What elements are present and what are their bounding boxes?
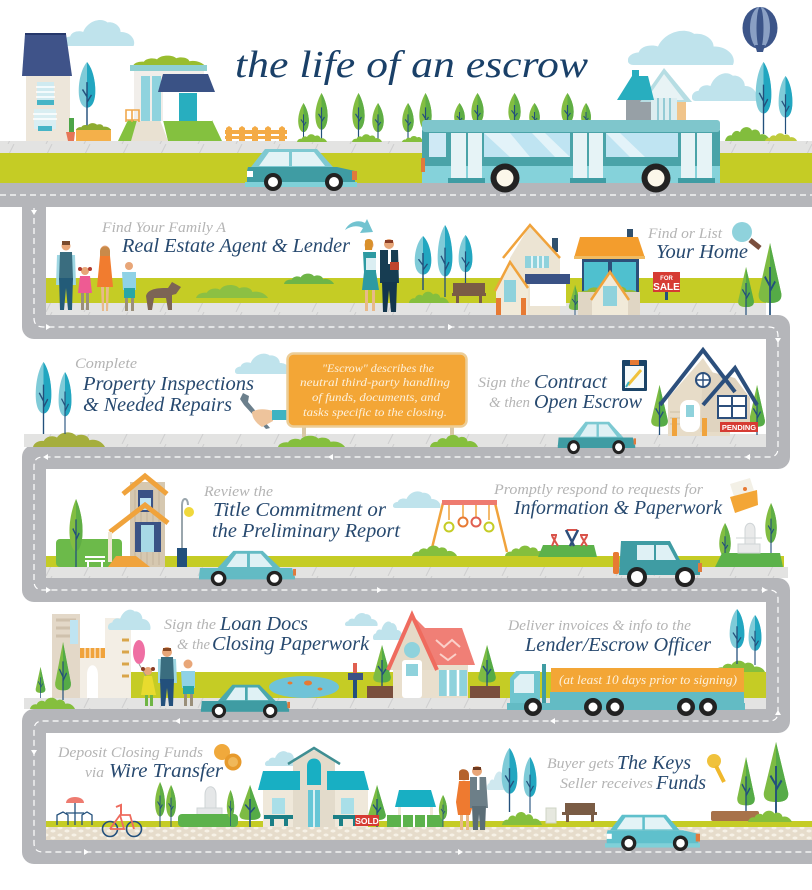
text: the keys (547, 753, 706, 794)
fence (225, 126, 287, 141)
text: contract: & then (489, 395, 530, 411)
text: inspections: & Needed Repairs (83, 395, 232, 416)
icon: clipboard (622, 360, 647, 391)
text: contract: Contract (534, 372, 608, 393)
house: tall navy roof (22, 34, 72, 141)
text: find agent (101, 220, 350, 257)
poplars (502, 748, 542, 825)
text: loan docs: Loan Docs (219, 614, 308, 635)
text: title commitment: Review the (203, 484, 274, 500)
house: red roof (367, 615, 500, 698)
text: contract: Open Escrow (534, 392, 642, 413)
icon: envelope (730, 478, 758, 513)
swing set (432, 500, 507, 552)
clouds (63, 20, 757, 101)
callout: escrow definition (288, 354, 466, 437)
text: title commitment (203, 484, 401, 542)
car (245, 149, 357, 191)
text: inspections: Complete (75, 356, 138, 372)
sold sign: SOLD (355, 816, 379, 826)
text: find home: Find or List (647, 226, 723, 242)
family (56, 241, 136, 311)
tree and planter (66, 62, 111, 141)
buildings (52, 614, 131, 698)
poplars and bench (409, 225, 486, 303)
poplars (715, 609, 765, 672)
text: the keys: The Keys (617, 753, 691, 774)
panel: step 4 loan docs and invoices (24, 609, 766, 718)
dog (146, 282, 181, 310)
callout: escrow definition: "Escrow" describes the (322, 363, 434, 375)
title: the life of an escrow (235, 44, 589, 86)
car (605, 815, 700, 851)
house: teal roof (617, 68, 692, 122)
text: contract: Sign the (478, 375, 531, 391)
agents (362, 239, 399, 312)
text: wire transfer: Wire Transfer (109, 761, 223, 782)
text: find agent: Real Estate Agent & Lender (121, 236, 350, 257)
text: lender (507, 618, 711, 656)
text: inspections (75, 356, 254, 416)
text: the keys: Funds (655, 773, 706, 794)
panel: top street scene (0, 7, 812, 192)
text: the keys: Buyer gets (547, 756, 614, 772)
cloud (487, 771, 511, 790)
bench (562, 803, 597, 822)
house: orange gables (495, 225, 570, 315)
trash can (546, 808, 556, 823)
patio table (57, 797, 92, 825)
text: paperwork (493, 482, 722, 519)
bushes (278, 435, 478, 447)
text: paperwork: Promptly respond to requests for (493, 482, 703, 498)
cloud (108, 610, 151, 630)
orange banner: (at least 10 days prior to signing) (559, 672, 737, 687)
trees right (725, 62, 797, 141)
icon: hot air balloon (742, 7, 778, 52)
house: flat green roof (118, 56, 222, 141)
text: loan docs: Closing Paperwork (212, 634, 369, 655)
cloud (235, 354, 290, 374)
callout: escrow definition: neutral third-party handling (300, 377, 450, 389)
icon: coins (214, 744, 242, 770)
callout: escrow definition: tasks specific to the closing. (303, 407, 447, 419)
text: lender: Lender/Escrow Officer (524, 635, 711, 656)
text: wire transfer (57, 745, 223, 782)
text: loan docs (164, 614, 369, 655)
panel: step 1 agent and home (46, 219, 781, 315)
fountain and trees (715, 503, 783, 567)
truck with banner (507, 664, 745, 716)
cloud (265, 751, 301, 766)
callout: escrow definition: of funds, documents, and (312, 392, 440, 404)
car (199, 551, 296, 586)
for sale sign: SALE (653, 282, 680, 293)
trees and logs (711, 742, 792, 822)
text: paperwork: Information & Paperwork (513, 498, 722, 519)
house: tower (108, 476, 168, 567)
panel: step 2 inspections and contract (24, 350, 766, 454)
text: the keys: Seller receives (560, 776, 653, 792)
text: find home: Your Home (656, 242, 748, 263)
mansion (258, 748, 386, 827)
bushes (196, 274, 334, 298)
text: wire transfer: Deposit Closing Funds (57, 745, 203, 761)
family with balloon (133, 640, 195, 706)
arrow (345, 219, 373, 233)
text: find home (647, 226, 748, 263)
road network (0, 195, 812, 855)
icon: wrench and hand (240, 393, 288, 429)
text: title commitment: the Preliminary Report (212, 521, 401, 542)
car (201, 685, 290, 718)
house: orange roof (569, 229, 645, 315)
trees (30, 642, 75, 709)
icon: magnifying glass (732, 222, 760, 248)
hedge and trees (178, 785, 261, 827)
panel: step 5 closing (46, 742, 812, 851)
house: pending (651, 350, 765, 436)
gazebo (387, 790, 447, 827)
pond (269, 676, 339, 698)
for sale sign: FOR (660, 276, 673, 282)
bushes and picnic table (412, 530, 597, 557)
trees (155, 782, 176, 827)
street lamp (177, 499, 194, 567)
text: find agent: Find Your Family A (101, 220, 226, 236)
trees right (738, 243, 781, 315)
text: loan docs: & the (177, 637, 211, 653)
poplars (33, 362, 105, 447)
panel: step 3 review and paperwork (46, 476, 788, 587)
jeep (613, 541, 702, 587)
text: loan docs: Sign the (164, 617, 217, 633)
mailbox (348, 663, 363, 698)
house: pending: PENDING (722, 423, 756, 432)
icon: key (707, 754, 724, 782)
text: wire transfer: via (85, 765, 104, 781)
hedge and tree (56, 499, 122, 567)
text: title commitment: Title Commitment or (213, 500, 386, 521)
bus (421, 120, 720, 192)
row of trees (297, 93, 591, 142)
fountain (197, 787, 222, 820)
text: lender: Deliver invoices & info to the (507, 618, 692, 634)
car (558, 422, 636, 454)
orange banner (551, 668, 744, 692)
for sale sign (653, 272, 680, 300)
text: inspections: Property Inspections (82, 374, 254, 395)
cloud (393, 491, 440, 508)
text: contract (478, 372, 642, 413)
clouds (345, 613, 403, 640)
bicycle (102, 805, 142, 836)
couple (456, 766, 488, 830)
